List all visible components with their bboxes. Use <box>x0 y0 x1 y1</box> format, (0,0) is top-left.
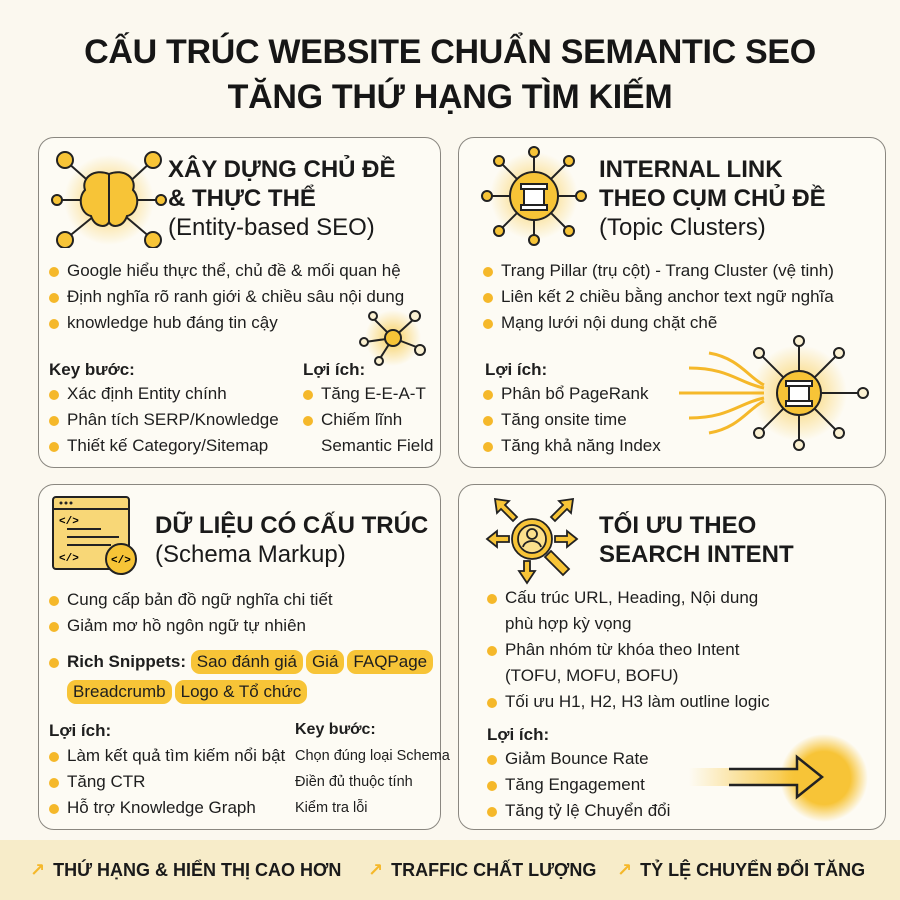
rich snippets tags: Rich Snippets: <box>67 652 186 671</box>
bullet list: Trang Pillar (trụ cột) - Trang Cluster (vệ tinh) <box>501 261 834 280</box>
bullet list: Phân nhóm từ khóa theo Intent <box>505 640 739 659</box>
panel: entity-based SEO <box>38 137 441 468</box>
panel: internal link topic clusters: Tăng onsite time <box>501 410 627 429</box>
title <box>84 32 816 116</box>
icon: network <box>359 310 426 366</box>
panel: entity-based SEO: Thiết kế Category/Sitemap <box>67 436 268 455</box>
icon: brain network <box>51 151 167 248</box>
benefits: Lợi ích: <box>303 360 365 379</box>
outcome: traffic: ↗ TRAFFIC CHẤT LƯỢNG <box>368 860 596 880</box>
panel: schema markup: Điền đủ thuộc tính <box>295 774 413 790</box>
title: TĂNG THỨ HẠNG TÌM KIẾM <box>228 78 672 116</box>
rich snippets tags: Sao đánh giá <box>197 652 297 671</box>
heading: (Entity-based SEO) <box>168 214 375 241</box>
heading: (Topic Clusters) <box>599 214 766 241</box>
rich snippets tags: Giá <box>312 652 338 671</box>
heading: & THỰC THỂ <box>168 185 316 212</box>
icon: user search with arrows <box>486 498 578 584</box>
bullet list <box>483 261 834 332</box>
heading <box>155 511 428 568</box>
panel: search intent: Tăng Engagement <box>505 775 645 794</box>
bullet list: Mạng lưới nội dung chặt chẽ <box>501 313 717 332</box>
heading <box>599 511 794 568</box>
panel: entity-based SEO: Phân tích SERP/Knowledge <box>67 410 279 429</box>
bullet list <box>49 590 333 635</box>
bullet list: Định nghĩa rõ ranh giới & chiều sâu nội dung <box>67 287 404 306</box>
panel: internal link topic clusters: Tăng khả năng Index <box>501 436 661 455</box>
panel: schema markup: Hỗ trợ Knowledge Graph <box>67 798 256 817</box>
benefits: Lợi ích: <box>485 360 547 379</box>
bullet list: Cung cấp bản đồ ngữ nghĩa chi tiết <box>67 590 333 609</box>
icon: code window: </> <box>111 555 131 567</box>
heading <box>168 155 396 241</box>
icon: code window: </> <box>59 516 79 528</box>
key steps: Key bước: <box>295 721 376 738</box>
panel: entity-based SEO: Semantic Field <box>321 436 433 455</box>
panel: entity-based SEO: Chiếm lĩnh <box>321 410 402 429</box>
heading: SEARCH INTENT <box>599 541 794 568</box>
panel: schema markup: Chọn đúng loại Schema <box>295 748 450 764</box>
panel: schema markup: Làm kết quả tìm kiếm nổi bật <box>67 746 285 765</box>
heading: THEO CỤM CHỦ ĐỀ <box>599 185 826 212</box>
rich snippets tags: Logo & Tổ chức <box>181 682 301 701</box>
panel: search intent: Giảm Bounce Rate <box>505 749 649 768</box>
bullet list: Giảm mơ hồ ngôn ngữ tự nhiên <box>67 616 306 635</box>
icon: arrow forward <box>694 735 867 821</box>
heading <box>599 156 826 241</box>
panel: search intent: Tăng tỷ lệ Chuyển đổi <box>505 801 670 820</box>
panel: entity-based SEO: Xác định Entity chính <box>67 384 227 403</box>
rich snippets tags: FAQPage <box>353 652 427 671</box>
panel: search intent <box>458 484 886 830</box>
bullet list <box>49 261 404 332</box>
heading: INTERNAL LINK <box>599 156 783 183</box>
bullet list: knowledge hub đáng tin cậy <box>67 313 278 332</box>
bullet list: phù hợp kỳ vọng <box>505 614 631 633</box>
bullet list: Cấu trúc URL, Heading, Nội dung <box>505 588 758 607</box>
bullet list: Google hiểu thực thể, chủ đề & mối quan hệ <box>67 261 401 280</box>
benefits: Lợi ích: <box>487 725 549 744</box>
bottom band <box>0 840 900 900</box>
bullet list <box>487 588 770 711</box>
bullet list: Tối ưu H1, H2, H3 làm outline logic <box>505 692 770 711</box>
icon: link flow to pillar <box>679 335 869 451</box>
panel: schema markup: Kiểm tra lỗi <box>295 800 368 816</box>
icon: code window <box>52 496 137 575</box>
bullet list: (TOFU, MOFU, BOFU) <box>505 666 678 685</box>
icon: code window: </> <box>59 553 79 565</box>
benefits: Lợi ích: <box>49 721 111 740</box>
icon: pillar hub <box>481 146 587 246</box>
panel: schema markup: Tăng CTR <box>67 772 145 791</box>
panel: entity-based SEO: Tăng E-E-A-T <box>321 384 426 403</box>
heading: (Schema Markup) <box>155 541 346 568</box>
key steps: Key bước: <box>49 360 135 379</box>
title: CẤU TRÚC WEBSITE CHUẨN SEMANTIC SEO <box>84 33 816 71</box>
rich snippets tags <box>49 650 433 704</box>
heading: XÂY DỰNG CHỦ ĐỀ <box>168 156 396 183</box>
panel: internal link topic clusters <box>458 137 886 468</box>
outcome: conversion: ↗ TỶ LỆ CHUYỂN ĐỔI TĂNG <box>617 860 865 880</box>
outcome: ranking: ↗ THỨ HẠNG & HIỂN THỊ CAO HƠN <box>30 860 341 880</box>
rich snippets tags: Breadcrumb <box>73 682 166 701</box>
panel: internal link topic clusters: Phân bổ PageRank <box>501 384 648 403</box>
bullet list: Liên kết 2 chiều bằng anchor text ngữ nghĩa <box>501 287 834 306</box>
heading: TỐI ƯU THEO <box>599 512 756 539</box>
heading: DỮ LIỆU CÓ CẤU TRÚC <box>155 512 428 539</box>
panel: schema markup <box>38 484 441 830</box>
